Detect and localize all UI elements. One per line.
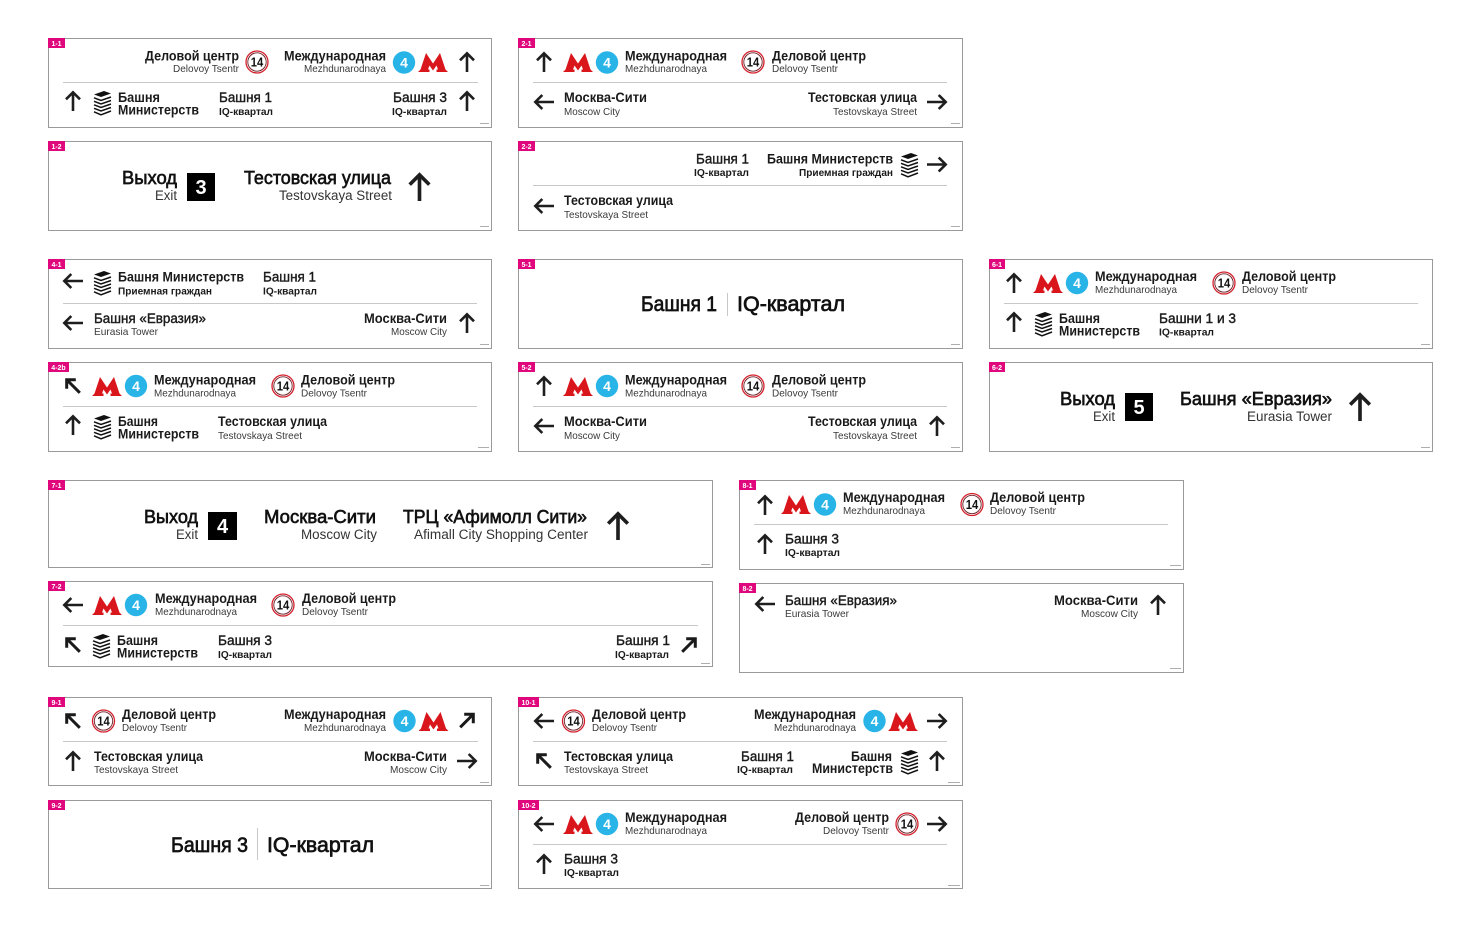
- exit label: [1060, 388, 1115, 424]
- destination: Тестовская улица: Тестовская улица: [564, 192, 673, 208]
- destination: Тестовская улица: Testovskaya Street: [833, 106, 917, 118]
- destination: Москва-Сити: Москва-Сити: [564, 413, 647, 429]
- tag 5-1: 5-1: [521, 262, 532, 269]
- tag 9-1: 9-1: [51, 700, 62, 707]
- destination: Башня Министерств: [94, 268, 244, 298]
- destination: Башня 1: IQ-квартал: [737, 765, 793, 776]
- exit label: Exit: [176, 527, 198, 542]
- destination: Тестовская улица: Тестовская улица: [808, 89, 917, 105]
- destination: Москва-Сити: [364, 310, 448, 338]
- destination: Башня Министерств: Башня Министерств: [118, 268, 244, 284]
- destination: Башня 1: [615, 632, 670, 661]
- arrow up: [930, 752, 944, 771]
- destination: ТРЦ «Афимолл Сити»: [403, 506, 588, 542]
- destination: Международная: Международная: [284, 706, 386, 722]
- destination: Деловой центр: [1213, 268, 1336, 296]
- destination: Деловой центр: Деловой центр: [301, 372, 395, 388]
- destination: Тестовская улица: [218, 413, 327, 442]
- destination: Деловой центр: [272, 590, 396, 618]
- panel: sign 7-1: [48, 480, 712, 568]
- panel: sign 1-2: [48, 141, 492, 230]
- arrow up: [1007, 274, 1021, 293]
- arrow up: [930, 417, 944, 436]
- destination: Башня Министерств: Приемная граждан: [118, 286, 212, 298]
- destination: Башня 1: Башня 1: [616, 632, 670, 648]
- destination: Тестовская улица: Тестовская улица: [808, 413, 917, 429]
- destination: Деловой центр: Delovoy Tsentr: [823, 825, 889, 837]
- tag 2-1: 2-1: [521, 41, 532, 48]
- arrow up: [1007, 313, 1021, 332]
- destination: Международная: Международная: [284, 48, 386, 64]
- arrow up: [537, 377, 551, 396]
- panel: sign 2-1: [518, 38, 962, 128]
- destination: Международная: Mezhdunarodnaya: [625, 825, 707, 837]
- destination: Деловой центр: [795, 809, 918, 837]
- destination: Международная: [563, 809, 727, 837]
- destination: Башня Министерств: [812, 748, 918, 776]
- destination: Башня Министерств: Башня: [118, 89, 160, 105]
- arrow up: [460, 53, 474, 72]
- arrow up-left: [67, 715, 80, 728]
- tag 4-1: 4-1: [51, 262, 62, 269]
- destination: Башня «Евразия»: Башня «Евразия»: [785, 592, 897, 608]
- destination: Международная: Mezhdunarodnaya: [625, 63, 707, 75]
- destination: Башня «Евразия»: [94, 310, 206, 338]
- destination: Башня 1 IQ-квартал: [641, 293, 845, 316]
- destination: Международная: [284, 706, 448, 734]
- destination: Башня 1: Башня 1: [219, 89, 272, 105]
- destination: Деловой центр: Delovoy Tsentr: [772, 63, 838, 75]
- exit number 4: 4: [217, 516, 229, 538]
- destination: Москва-Сити: [564, 89, 647, 118]
- destination: Башня 1: Башня 1: [696, 150, 749, 166]
- destination: Тестовская улица: Тестовская улица: [94, 748, 203, 764]
- tag 5-2: [518, 362, 535, 372]
- destination: Международная: Международная: [625, 48, 727, 64]
- destination: Деловой центр: Деловой центр: [990, 489, 1085, 505]
- exit label: Exit: [155, 188, 177, 203]
- destination: Башня Министерств: Башня: [1059, 310, 1100, 326]
- destination: Международная: Международная: [625, 372, 727, 388]
- exit number 5: [1125, 393, 1153, 421]
- arrow up-right: [682, 639, 695, 652]
- tag 1-2: 1-2: [51, 144, 62, 151]
- destination: Международная: Mezhdunarodnaya: [625, 388, 707, 400]
- destination: Тестовская улица: [94, 748, 203, 776]
- destination: Башня 3: [392, 89, 447, 118]
- destination: Деловой центр: [272, 372, 395, 400]
- destination: Москва-Сити: Moscow City: [391, 326, 448, 338]
- destination: Москва-Сити: Moscow City: [564, 106, 621, 118]
- destination: Международная: Mezhdunarodnaya: [304, 722, 386, 734]
- destination: Башня Министерств: Башня: [851, 748, 892, 764]
- destination: Башня Министерств: [93, 632, 198, 660]
- destination: Тестовская улица: [564, 192, 673, 221]
- destination: Башня 3 IQ-квартал: [171, 828, 374, 860]
- destination: Деловой центр: Деловой центр: [772, 372, 866, 388]
- tag 10-1: 10-1: [521, 700, 536, 707]
- destination: Башня Министерств: Министерств: [812, 760, 893, 776]
- arrow up: [66, 752, 80, 771]
- arrow left: [535, 95, 554, 109]
- destination: Башня Министерств: Башня Министерств: [767, 150, 893, 166]
- destination: Деловой центр: Delovoy Tsentr: [173, 63, 239, 75]
- destination: Международная: [563, 372, 727, 400]
- tag 4-2b: [48, 362, 69, 372]
- panel: sign 9-1: [48, 697, 492, 786]
- destination: Москва-Сити: Москва-Сити: [564, 89, 647, 105]
- arrow left: [535, 419, 554, 433]
- destination: Башня 3: IQ-квартал: [564, 868, 619, 879]
- destination: Башня 1: Башня 1: [741, 748, 794, 764]
- arrow up: [66, 416, 80, 435]
- arrow up-left: [67, 380, 80, 393]
- destination: Деловой центр: Delovoy Tsentr: [122, 722, 187, 734]
- arrow left: [535, 199, 554, 213]
- destination: Деловой центр: [961, 489, 1085, 517]
- destination: Башня 1: IQ-квартал: [615, 650, 669, 661]
- exit number 4: [208, 512, 237, 540]
- tag 2-1: [518, 38, 535, 48]
- destination: Башня 1: [219, 89, 273, 118]
- destination: Деловой центр: Delovoy Tsentr: [592, 722, 657, 734]
- tag 7-1: 7-1: [51, 483, 62, 490]
- destination: Международная: Международная: [154, 372, 256, 388]
- tag 7-2: 7-2: [51, 584, 62, 591]
- destination: Башня 1: IQ-квартал: [219, 107, 273, 118]
- destination: Башня Министерств: Приемная граждан: [799, 168, 893, 179]
- destination: Тестовская улица: Тестовская улица: [218, 413, 327, 429]
- destination: Тестовская улица: Testovskaya Street: [564, 209, 648, 221]
- arrow right: [927, 158, 946, 172]
- destination: Международная: Международная: [843, 489, 945, 505]
- destination: Тестовская улица: [808, 89, 917, 118]
- arrow right: [927, 95, 946, 109]
- destination: Деловой центр: Деловой центр: [1242, 268, 1336, 284]
- destination: Башня «Евразия»: Башня «Евразия»: [94, 310, 206, 326]
- destination: Москва-Сити: Moscow City: [564, 430, 621, 442]
- tag 1-1: [48, 38, 65, 48]
- destination: Тестовская улица: [244, 167, 392, 203]
- destination: Международная: [563, 48, 727, 75]
- exit label: Выход: [1060, 388, 1115, 409]
- destination: Международная: Международная: [1095, 268, 1197, 284]
- destination: Тестовская улица: Testovskaya Street: [94, 764, 178, 776]
- destination: Международная: Mezhdunarodnaya: [304, 63, 386, 75]
- destination: Москва-Сити: Москва-Сити: [364, 748, 447, 764]
- destination: Деловой центр: [92, 706, 216, 734]
- destination: Деловой центр: Delovoy Tsentr: [990, 505, 1056, 517]
- large arrow up: [410, 175, 429, 201]
- tag 4-2b: 4-2b: [51, 365, 66, 372]
- destination: ТРЦ «Афимолл Сити»: Afimall City Shopping Center: [414, 527, 588, 542]
- exit label: Выход: [122, 167, 177, 188]
- destination: Деловой центр: [562, 706, 686, 734]
- destination: Башня Министерств: [94, 413, 199, 442]
- arrow up: [1151, 596, 1165, 615]
- destination: Деловой центр: [742, 372, 866, 400]
- destination: Деловой центр: [145, 48, 268, 75]
- destination: Башня «Евразия»: [785, 592, 897, 620]
- destination: Башня Министерств: [1035, 310, 1140, 338]
- destination: Башня 3: [785, 530, 840, 559]
- destination: Москва-Сити: Москва-Сити: [264, 506, 376, 527]
- destination: Башня 3: [564, 850, 619, 879]
- destination: Москва-Сити: Moscow City: [1081, 608, 1139, 620]
- panel: sign 1-1: [48, 38, 492, 128]
- exit number 3: [187, 173, 215, 201]
- arrow left: [535, 817, 554, 831]
- tag 6-2: 6-2: [992, 365, 1002, 372]
- arrow left: [64, 316, 83, 330]
- large arrow up: [608, 514, 628, 540]
- destination: Башня 3: Башня 3: [218, 632, 272, 648]
- destination: Тестовская улица: Тестовская улица: [244, 167, 392, 188]
- tag 8-1: 8-1: [742, 483, 753, 490]
- arrow up: [758, 535, 772, 554]
- destination: Международная: [754, 706, 918, 734]
- destination: Международная: [1033, 268, 1197, 296]
- destination: Башня Министерств: Башня: [118, 413, 158, 429]
- destination: Москва-Сити: [1054, 592, 1139, 620]
- panel: sign 8-2: [739, 583, 1184, 672]
- destination: Международная: Международная: [155, 590, 257, 606]
- destination: Башни 1 и 3: IQ-квартал: [1159, 328, 1214, 338]
- destination: Башня 3: Башня 3: [564, 850, 618, 866]
- panel: sign 4-1: [48, 259, 492, 348]
- destination: Международная: Mezhdunarodnaya: [774, 722, 856, 734]
- tag 10-2: [518, 800, 539, 810]
- destination: Башня 3: IQ-квартал: [218, 650, 272, 661]
- arrow up: [537, 53, 551, 72]
- destination: Деловой центр: Деловой центр: [122, 706, 216, 722]
- exit label: [122, 167, 177, 203]
- panel: sign 7-2: [48, 581, 712, 666]
- destination: Москва-Сити: [264, 506, 377, 542]
- destination: Башня Министерств: [94, 89, 199, 118]
- destination: Тестовская улица: [808, 413, 917, 442]
- destination: Международная: Mezhdunarodnaya: [155, 606, 237, 618]
- destination: Башня 1: IQ-квартал: [694, 168, 749, 179]
- destination: Башня «Евразия»: [1180, 388, 1332, 424]
- tag 6-1: [989, 259, 1005, 269]
- destination: Международная: Mezhdunarodnaya: [154, 388, 236, 400]
- panel: sign 4-2b: [48, 362, 492, 452]
- destination: Тестовская улица: Testovskaya Street: [564, 764, 648, 776]
- destination: Башня 1: [737, 748, 794, 776]
- panel: sign 5-2: [518, 362, 962, 452]
- arrow left: [64, 274, 83, 288]
- destination: Башня 3 IQ-квартал: IQ-квартал: [267, 834, 374, 857]
- tag 8-2: 8-2: [742, 586, 753, 593]
- exit label: Выход: [144, 506, 198, 527]
- tag 9-2: 9-2: [51, 803, 62, 810]
- destination: Башня Министерств: Министерств: [118, 102, 199, 118]
- panel: sign 9-2: [48, 800, 492, 888]
- destination: Башня Министерств: Башня: [117, 632, 158, 648]
- destination: Международная: [284, 48, 448, 75]
- destination: Деловой центр: [742, 48, 866, 75]
- destination: Москва-Сити: [564, 413, 647, 442]
- destination: Международная: [781, 489, 945, 517]
- panel: sign 6-1: [989, 259, 1432, 348]
- tag 1-1: 1-1: [51, 41, 62, 48]
- destination: Башня «Евразия»: Башня «Евразия»: [1180, 388, 1332, 409]
- destination: Международная: [92, 590, 257, 618]
- destination: Тестовская улица: Testovskaya Street: [279, 188, 392, 203]
- destination: Башня 3 IQ-квартал: Башня 3: [171, 834, 248, 857]
- destination: Башня 1: [263, 268, 317, 298]
- tag 2-2: 2-2: [521, 144, 532, 151]
- arrow left: [535, 714, 554, 728]
- destination: Башня Министерств: Министерств: [1059, 322, 1140, 338]
- destination: Башня 1 IQ-квартал: IQ-квартал: [737, 293, 845, 316]
- panel: sign 6-2: [989, 362, 1432, 452]
- destination: Башня Министерств: Министерств: [117, 644, 198, 660]
- tag 8-1: [739, 480, 756, 490]
- tag 6-2: [989, 362, 1005, 372]
- destination: Башня «Евразия»: Eurasia Tower: [94, 326, 158, 338]
- arrow up: [537, 855, 551, 874]
- destination: Москва-Сити: Moscow City: [301, 527, 377, 542]
- destination: Башня 3: Башня 3: [393, 89, 447, 105]
- tag 5-2: 5-2: [521, 365, 532, 372]
- destination: Международная: Mezhdunarodnaya: [1095, 284, 1177, 296]
- arrow up-left: [67, 639, 80, 652]
- destination: Деловой центр: Delovoy Tsentr: [301, 388, 367, 400]
- destination: Тестовская улица: [564, 748, 673, 776]
- destination: Башня Министерств: [767, 150, 918, 179]
- destination: Деловой центр: Деловой центр: [592, 706, 686, 722]
- arrow up: [460, 92, 474, 111]
- destination: Москва-Сити: [364, 748, 448, 776]
- destination: Башня 3: [218, 632, 272, 661]
- exit number 3: 3: [195, 177, 207, 199]
- tag 2-2: [518, 141, 535, 151]
- panel: sign 10-1: [518, 697, 962, 786]
- tag 7-1: [48, 480, 65, 490]
- destination: Тестовская улица: Testovskaya Street: [218, 430, 302, 442]
- large arrow up: [1350, 395, 1370, 421]
- panel: sign 5-1: [518, 259, 962, 348]
- arrow up: [460, 314, 474, 333]
- destination: Тестовская улица: Тестовская улица: [564, 748, 673, 764]
- destination: Деловой центр: Delovoy Tsentr: [772, 388, 838, 400]
- destination: Башня 1 IQ-квартал: Башня 1: [641, 293, 717, 316]
- destination: Башня 3: IQ-квартал: [785, 548, 840, 559]
- exit number 5: 5: [1133, 397, 1145, 419]
- arrow up-left: [538, 755, 551, 768]
- destination: Башня 3: Башня 3: [785, 530, 839, 546]
- tag 10-1: [518, 697, 539, 707]
- tag 10-2: 10-2: [521, 803, 536, 810]
- destination: Международная: Mezhdunarodnaya: [843, 505, 925, 517]
- arrow right: [927, 817, 946, 831]
- exit label: Exit: [1093, 409, 1115, 424]
- tag 1-2: [48, 141, 65, 151]
- destination: Международная: Международная: [754, 706, 856, 722]
- tag 9-2: [48, 800, 65, 810]
- destination: Деловой центр: Delovoy Tsentr: [302, 606, 368, 618]
- destination: Деловой центр: Delovoy Tsentr: [1242, 284, 1308, 296]
- destination: Международная: Международная: [625, 809, 727, 825]
- destination: Башня 1: [694, 150, 749, 179]
- destination: Деловой центр: Деловой центр: [795, 809, 889, 825]
- tag 5-1: [518, 259, 535, 269]
- tag 4-1: [48, 259, 65, 269]
- destination: Тестовская улица: Testovskaya Street: [833, 430, 917, 442]
- panel: sign 8-1: [739, 480, 1184, 570]
- arrow up-right: [460, 714, 473, 727]
- destination: Башня 3: IQ-квартал: [392, 107, 447, 118]
- destination: Башни 1 и 3: [1159, 310, 1236, 338]
- tag 9-1: [48, 697, 65, 707]
- destination: Башня 1: IQ-квартал: [263, 286, 317, 298]
- arrow up: [66, 92, 80, 111]
- destination: Башни 1 и 3: Башни 1 и 3: [1159, 310, 1236, 326]
- arrow left: [756, 597, 775, 611]
- destination: Международная: [92, 372, 256, 400]
- destination: Деловой центр: Деловой центр: [772, 48, 866, 64]
- arrow right: [457, 754, 476, 768]
- arrow up: [758, 496, 772, 515]
- destination: Москва-Сити: Москва-Сити: [364, 310, 447, 326]
- tag 8-2: [739, 583, 756, 593]
- destination: Башня Министерств: Министерств: [118, 426, 199, 442]
- arrow left: [64, 598, 83, 612]
- destination: Москва-Сити: Москва-Сити: [1054, 592, 1138, 608]
- destination: Деловой центр: Деловой центр: [145, 48, 239, 64]
- destination: Деловой центр: Деловой центр: [302, 590, 396, 606]
- tag 7-2: [48, 581, 65, 591]
- destination: Башня «Евразия»: Eurasia Tower: [1247, 409, 1332, 424]
- arrow right: [927, 714, 946, 728]
- destination: Башня 1: Башня 1: [263, 268, 316, 284]
- tag 6-1: 6-1: [992, 262, 1002, 269]
- panel: sign 10-2: [518, 800, 962, 888]
- destination: Башня «Евразия»: Eurasia Tower: [785, 608, 849, 620]
- destination: Москва-Сити: Moscow City: [390, 764, 448, 776]
- exit label: [144, 506, 198, 542]
- panel: sign 2-2: [518, 141, 962, 230]
- destination: ТРЦ «Афимолл Сити»: ТРЦ «Афимолл Сити»: [403, 506, 587, 527]
